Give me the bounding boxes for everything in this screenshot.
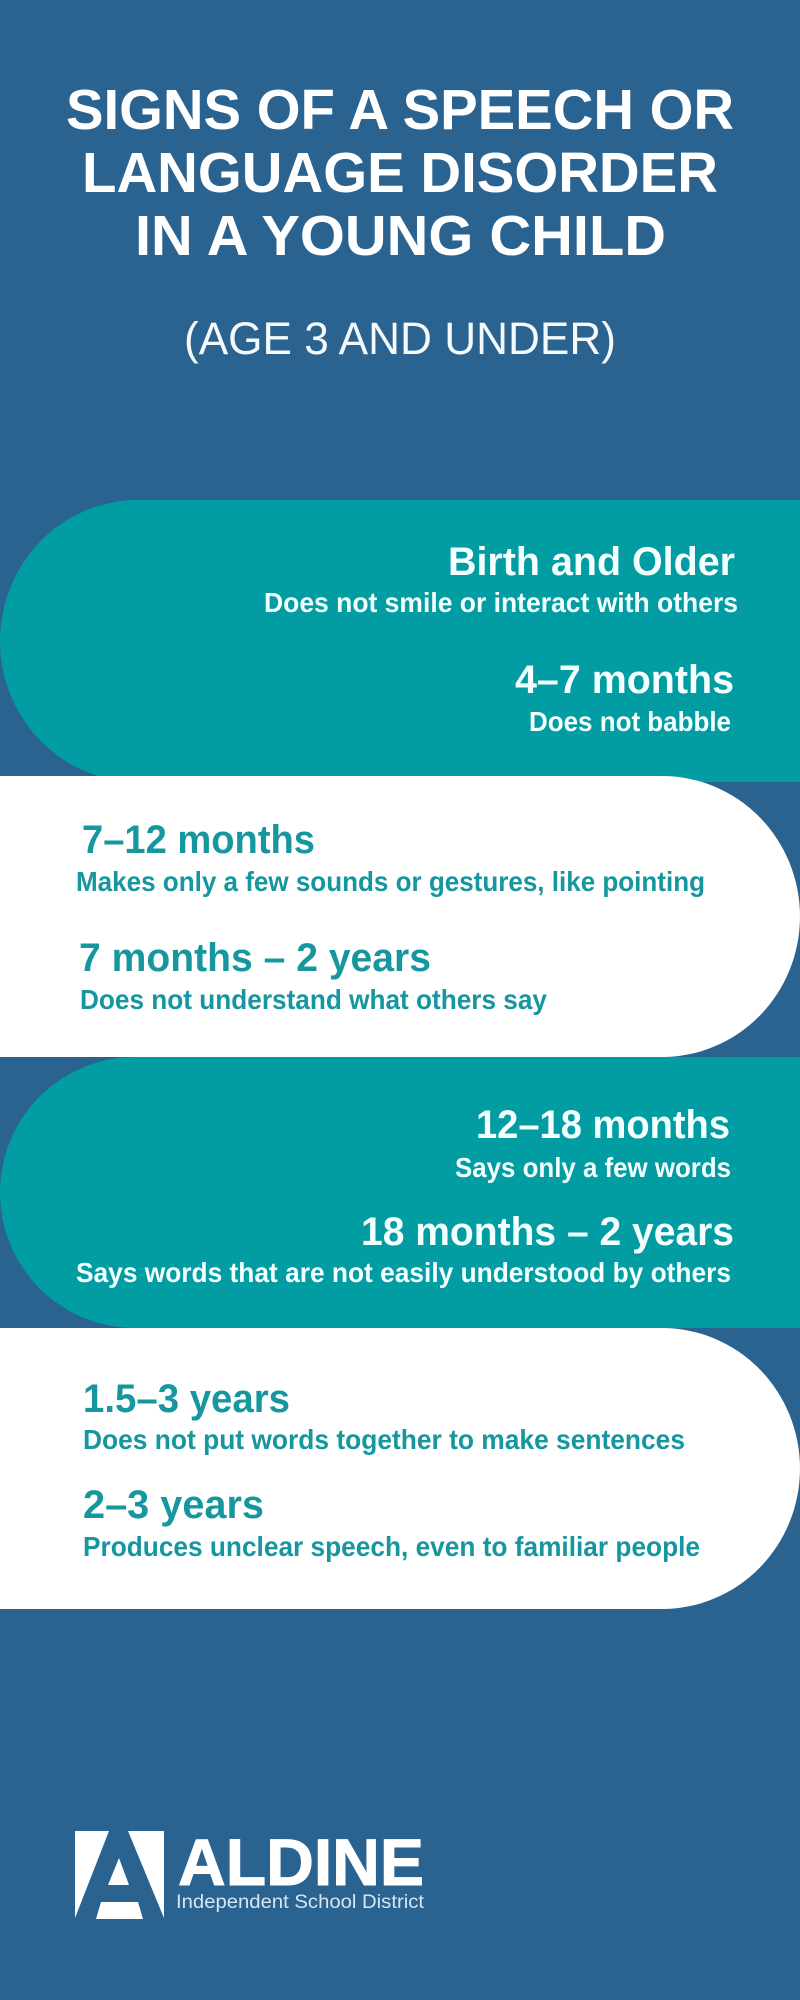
icon: Aldine A mark — [75, 1831, 164, 1919]
panel: birth to 7 months — [0, 500, 800, 782]
title: SIGNS OF A SPEECH OR — [66, 78, 734, 141]
item: birth and older — [264, 540, 738, 618]
item: 7-12 months — [76, 818, 705, 897]
item: 18 months to 2 years: 18 months – 2 years — [361, 1210, 734, 1254]
item: birth and older: Birth and Older — [448, 540, 735, 584]
title — [66, 78, 734, 267]
panel background — [0, 776, 800, 1057]
title: IN A YOUNG CHILD — [135, 204, 666, 267]
item: 7 months to 2 years: Does not understand what others say — [80, 984, 548, 1015]
item: 2-3 years: 2–3 years — [83, 1483, 264, 1527]
item: birth and older: Does not smile or interact with others — [264, 587, 738, 618]
item: 2-3 years: Produces unclear speech, even to familiar people — [83, 1531, 700, 1562]
panel background — [0, 1057, 800, 1328]
title: LANGUAGE DISORDER — [82, 141, 718, 204]
logo tagline: Independent School District — [176, 1891, 425, 1913]
item: 12-18 months — [455, 1103, 731, 1183]
subtitle: (AGE 3 AND UNDER) — [184, 313, 616, 364]
item: 7 months to 2 years — [79, 936, 548, 1015]
item: 12-18 months: 12–18 months — [476, 1103, 730, 1147]
item: 12-18 months: Says only a few words — [455, 1152, 731, 1183]
item: 7-12 months: 7–12 months — [82, 818, 315, 862]
item: 2-3 years — [83, 1483, 700, 1562]
panel background — [0, 500, 800, 782]
item: 4-7 months: 4–7 months — [515, 658, 734, 702]
item: 1.5-3 years: 1.5–3 years — [83, 1377, 290, 1421]
panel: 7 months to 2 years — [0, 776, 800, 1057]
item: 4-7 months: Does not babble — [529, 706, 731, 737]
item: 7 months to 2 years: 7 months – 2 years — [79, 936, 431, 980]
panel: 12 months to 2 years — [0, 1057, 800, 1328]
panel background — [0, 1328, 800, 1609]
item: 4-7 months — [515, 658, 734, 737]
panel: 1.5 to 3 years — [0, 1328, 800, 1609]
item: 18 months to 2 years — [76, 1210, 734, 1288]
logo wordmark: ALDINE — [178, 1825, 424, 1899]
item: 1.5-3 years: Does not put words together to make sentences — [83, 1424, 685, 1455]
item: 1.5-3 years — [83, 1377, 685, 1455]
logo: Aldine Independent School District — [75, 1825, 425, 1919]
item: 18 months to 2 years: Says words that are not easily understood by others — [76, 1257, 731, 1288]
item: 7-12 months: Makes only a few sounds or gestures, like pointing — [76, 866, 705, 897]
